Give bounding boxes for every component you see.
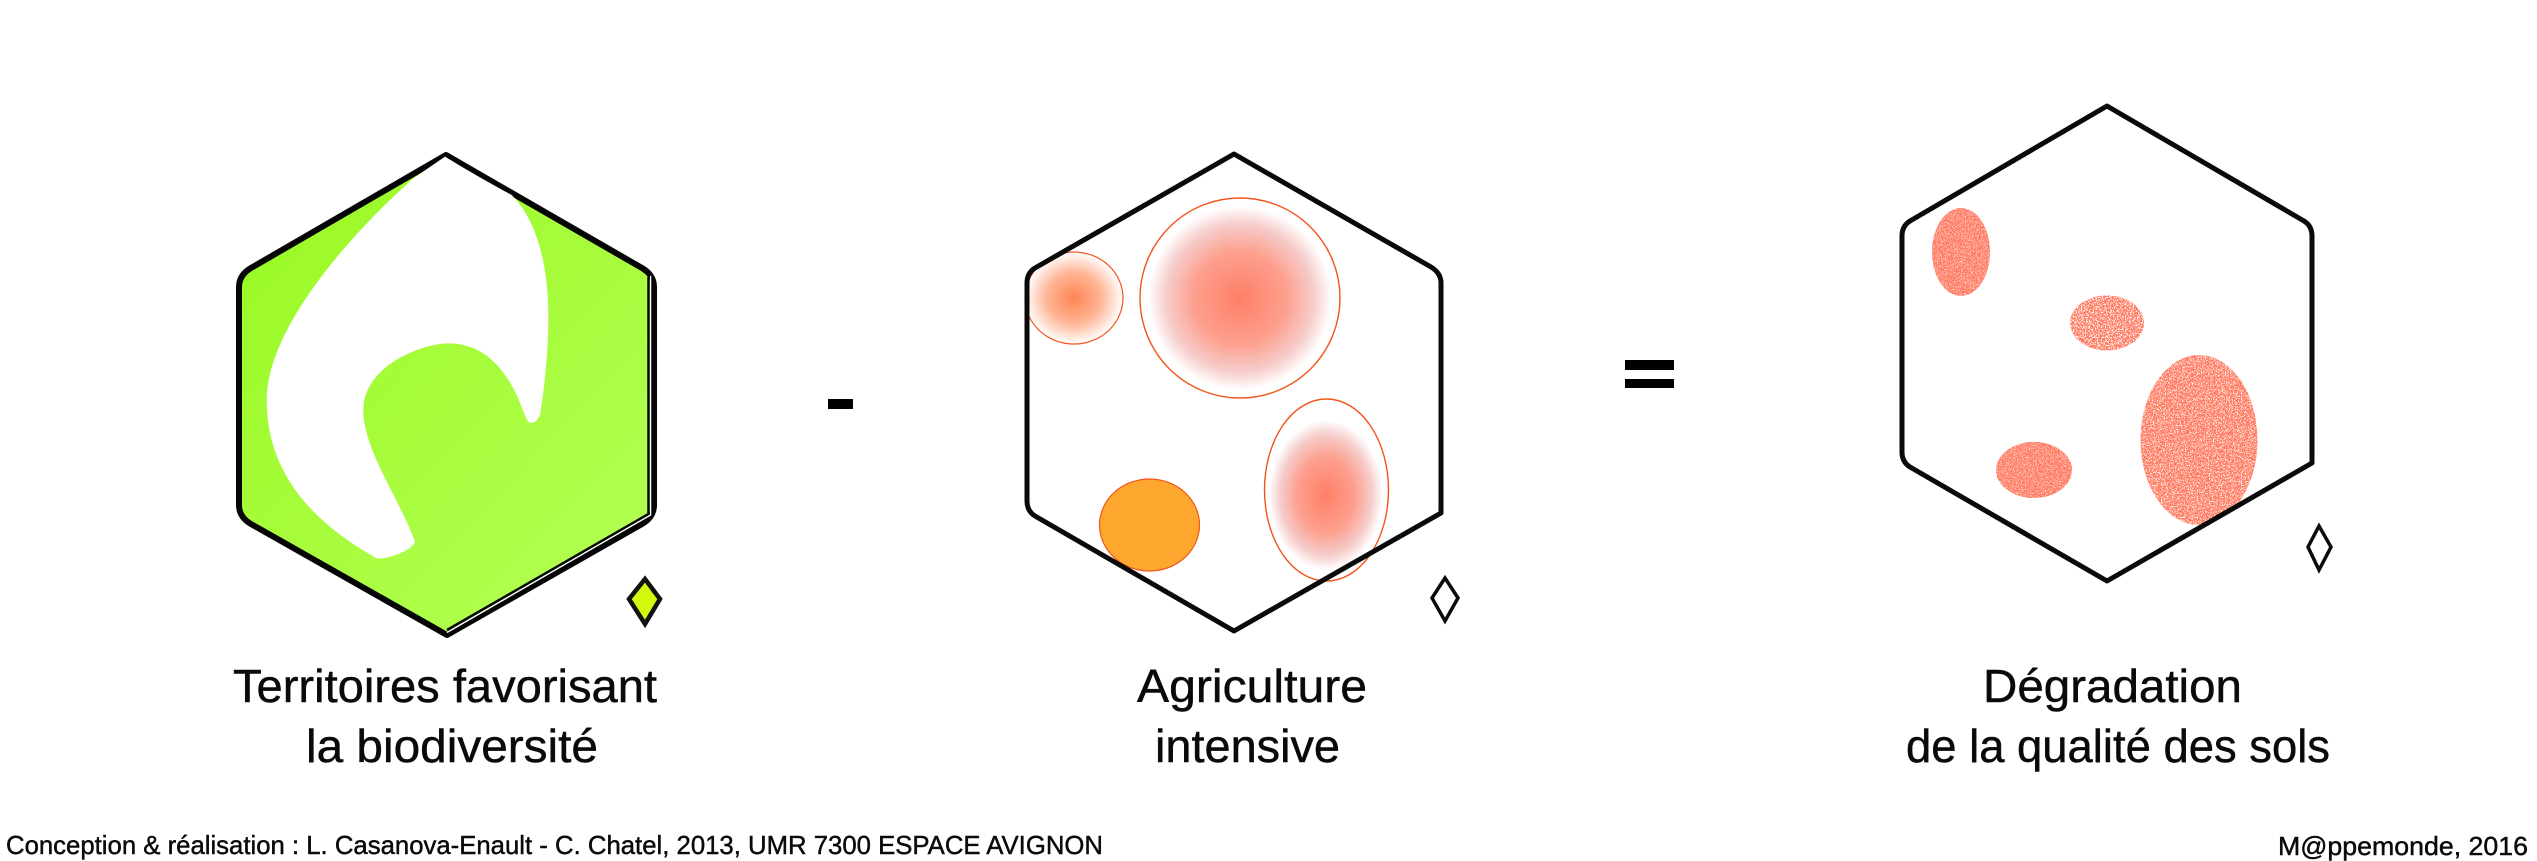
heading: biodiversity label: Territoires favorisant bbox=[233, 660, 657, 712]
heading: biodiversity label: la biodiversité bbox=[306, 720, 598, 772]
hexagon outline: degradation bbox=[1902, 106, 2312, 581]
panel: soil degradation bbox=[1902, 106, 2331, 772]
panel: biodiversity territories bbox=[233, 155, 660, 772]
icon: green diamond bbox=[629, 579, 660, 624]
operator: equals bbox=[1625, 360, 1674, 388]
patch: stippled upper left bbox=[1932, 208, 1990, 296]
patch: large pink gradient circle bbox=[1140, 198, 1340, 398]
patch: pink gradient ellipse bbox=[1264, 399, 1388, 581]
hexagon: green territory bbox=[239, 155, 654, 635]
credit: journal: M@ppemonde, 2016 bbox=[2278, 831, 2528, 861]
operator: minus bbox=[828, 399, 853, 409]
icon: white diamond degradation bbox=[2308, 526, 2331, 570]
credit: authors: Conception & réalisation : L. Casanova-Enault - C. Chatel, 2013, UMR 7300 ESPACE AVIGNON bbox=[6, 830, 1103, 860]
double edge: right side contour bbox=[447, 276, 651, 632]
hexagon outline: agriculture bbox=[1027, 154, 1441, 631]
white area: non favourable territory bbox=[267, 157, 548, 559]
patch: stippled centre bbox=[2070, 296, 2144, 350]
heading: agriculture label: intensive bbox=[1155, 720, 1340, 772]
panel: intensive agriculture bbox=[1025, 154, 1458, 772]
heading: agriculture label: Agriculture bbox=[1137, 660, 1367, 712]
patch: stippled large right bbox=[2140, 355, 2258, 525]
patch: stippled lower left bbox=[1996, 442, 2072, 498]
patch: solid orange ellipse bbox=[1100, 479, 1200, 571]
heading: degradation label: Dégradation bbox=[1983, 660, 2242, 712]
patch: small orange gradient bbox=[1025, 252, 1123, 344]
heading: degradation label: de la qualité des sols bbox=[1906, 720, 2330, 772]
icon: white diamond agriculture bbox=[1432, 578, 1458, 621]
